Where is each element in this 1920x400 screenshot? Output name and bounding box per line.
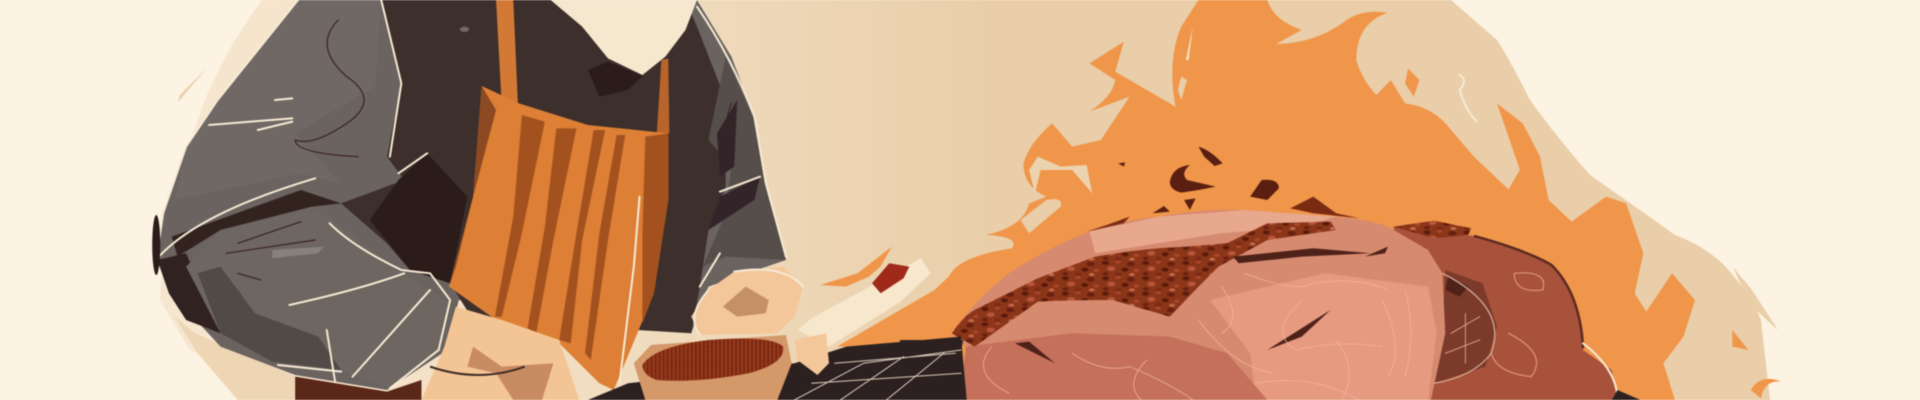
folded cuff fold: [272, 247, 324, 258]
right sleeve light: [703, 57, 786, 267]
left hand shadow: [467, 347, 553, 400]
grill bars: [795, 350, 961, 400]
apron neck strap right: [657, 58, 669, 133]
red sauce on tool: [872, 263, 909, 293]
jacket button: [460, 27, 469, 32]
front roast: [952, 210, 1445, 400]
roast top highlight: [1089, 210, 1336, 253]
dark sketch hair lines: [226, 20, 731, 280]
tan patch below arm: [175, 317, 295, 400]
roast sinew lines: [983, 273, 1411, 400]
flame scrap right 2: [1732, 330, 1748, 350]
grill rim: [1583, 343, 1618, 400]
back roast crust: [1394, 221, 1471, 238]
fingers on handle: [795, 333, 829, 375]
deep shadow under arm: [370, 153, 467, 283]
hem below jacket: [295, 377, 421, 400]
lower arm shadow: [157, 253, 221, 333]
spice bowl: [634, 335, 792, 400]
roast light side: [1210, 273, 1437, 400]
left hand: [421, 307, 579, 400]
pale wisp: [1460, 75, 1477, 122]
flame tan cutout: [1021, 199, 1061, 233]
apron edge shadow: [449, 86, 496, 287]
flame orange spot: [1405, 68, 1419, 97]
flame wisps left: [820, 247, 892, 287]
beard shadow: [588, 62, 642, 97]
sketch lines: [156, 0, 786, 388]
right hand shading: [723, 287, 769, 317]
back roast fold: [1434, 270, 1497, 383]
sleeve band shadow: [172, 190, 341, 257]
hand outline: [694, 269, 803, 335]
back roast: [1394, 227, 1618, 400]
jacket: [156, 0, 786, 390]
flame tan cutout left: [1029, 157, 1092, 193]
left grill piece: [900, 340, 963, 400]
tool handle: [797, 258, 931, 347]
flame tan notch: [1178, 77, 1187, 100]
roast outline: [1434, 273, 1495, 383]
roast dark panel: [960, 333, 1267, 400]
bowl spice: [642, 338, 783, 381]
backdrop streak right: [1733, 267, 1778, 330]
right sleeve dark fold: [708, 100, 760, 230]
back roast dark edge: [1474, 236, 1583, 348]
beard: [551, 0, 697, 75]
back roast veins: [1445, 273, 1544, 377]
upper arm highlight: [175, 0, 381, 200]
flame scrap right: [1751, 379, 1781, 398]
backdrop streak left: [178, 68, 207, 102]
apron neck strap left: [496, 0, 518, 107]
elbow mark: [152, 215, 160, 275]
apron body: [449, 86, 668, 390]
dark torso: [341, 0, 726, 333]
forearm shadow: [198, 267, 341, 370]
left grill lines: [900, 363, 952, 400]
flying spice flecks: [1118, 147, 1279, 213]
flame group: [820, 0, 1781, 400]
flame main body: [837, 0, 1695, 400]
roast group: [900, 197, 1640, 400]
right hand: [691, 267, 803, 335]
tongs in hand: [430, 367, 525, 375]
roast dark cracks: [1015, 247, 1468, 363]
apron stripes: [495, 115, 668, 360]
white apron seam: [619, 197, 640, 383]
forearm sleeve: [186, 207, 450, 388]
grill: [588, 337, 967, 400]
flame highlight streak: [1186, 27, 1193, 60]
chef group: [152, 0, 967, 400]
crust crumbs: [1087, 197, 1359, 232]
spice crust: [952, 222, 1336, 347]
bottom right grill: [1612, 390, 1640, 400]
